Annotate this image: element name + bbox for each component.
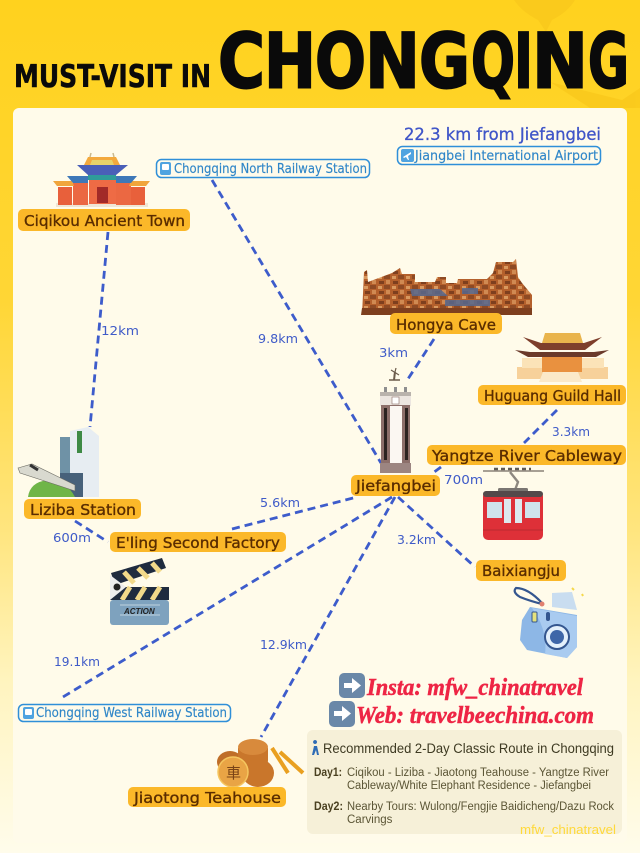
watermark: mfw_chinatravel [520,823,616,837]
label: jiefangbei: Jiefangbei [355,477,436,495]
icon: walker [312,740,319,755]
label: ciqikou: Ciqikou Ancient Town [24,212,185,230]
icon: camera [515,588,583,658]
km labels [53,323,590,669]
title: chongqing: N [532,16,588,106]
pill: north railway station: Chongqing North Railway Station [174,162,367,177]
social: insta: Insta: mfw_chinatravel [366,675,583,701]
icon: huguang guild hall [515,333,609,382]
km labels: 3.2km [397,532,436,547]
title: chongqing: Q [471,16,515,106]
km labels: 3km [379,345,408,360]
route lines [63,180,557,737]
title: chongqing: N [365,16,420,106]
label: huguang: Huguang Guild Hall [484,387,621,405]
panel: recommended route [307,730,622,834]
day 1: Day1: [314,767,342,779]
day 1 [314,767,609,792]
day 2: Carvings [347,814,393,826]
km labels: 19.1km [54,654,100,669]
icon: ciqikou temple [53,153,150,207]
km labels: 600m [53,530,91,545]
icon: liziba building [18,427,99,497]
label: yangtze: Yangtze River Cableway [431,447,622,465]
km labels: 9.8km [258,331,298,346]
airport distance text: 22.3 km from Jiefangbei [404,125,601,145]
icon: teahouse mahjong [217,739,303,787]
km labels: 5.6km [260,495,300,510]
day 2 [314,801,614,826]
label: baixiangju: Baixiangju [482,562,560,580]
icon: cable car [483,469,544,540]
route heading: Recommended 2-Day Classic Route in Chongqing [323,741,614,756]
title: chongqing: O [315,16,366,106]
title: chongqing: H [264,16,316,106]
pill: airport: Jiangbei International Airport [414,149,598,164]
title: chongqing: I [514,16,533,106]
km labels: 12km [101,323,139,338]
title [14,16,629,106]
pill: west railway station: Chongqing West Railway Station [36,706,227,721]
title: chongqing: C [218,16,265,106]
icon: jiefangbei monument [380,368,411,473]
label: eling: E'ling Second Factory [116,534,280,552]
day 2: Nearby Tours: Wulong/Fengjie Baidicheng/Dazu Rock [347,801,614,813]
title: must-visit in: MUST-VISIT IN [14,59,211,95]
label: jiaotong: Jiaotong Teahouse [133,789,281,807]
icon: hongya cave [361,259,532,315]
day 1: Cableway/White Elephant Residence - Jiefangbei [347,780,591,792]
icon: clapperboard [110,558,169,625]
social: web: Web: travelbeechina.com [356,703,594,729]
label: hongya: Hongya Cave [396,316,496,334]
km labels: 3.3km [552,424,590,439]
decorative ingots [514,0,640,108]
day 1: Ciqikou - Liziba - Jiaotong Teahouse - Yangtze River [347,767,609,779]
km labels: 12.9km [260,637,307,652]
day 2: Day2: [314,801,343,813]
icon: clapperboard: ACTION [123,607,155,616]
label: liziba: Liziba Station [30,501,136,519]
title: chongqing: G [419,16,470,106]
icon: teahouse mahjong: 車 [226,762,241,783]
km labels: 700m [444,472,483,487]
